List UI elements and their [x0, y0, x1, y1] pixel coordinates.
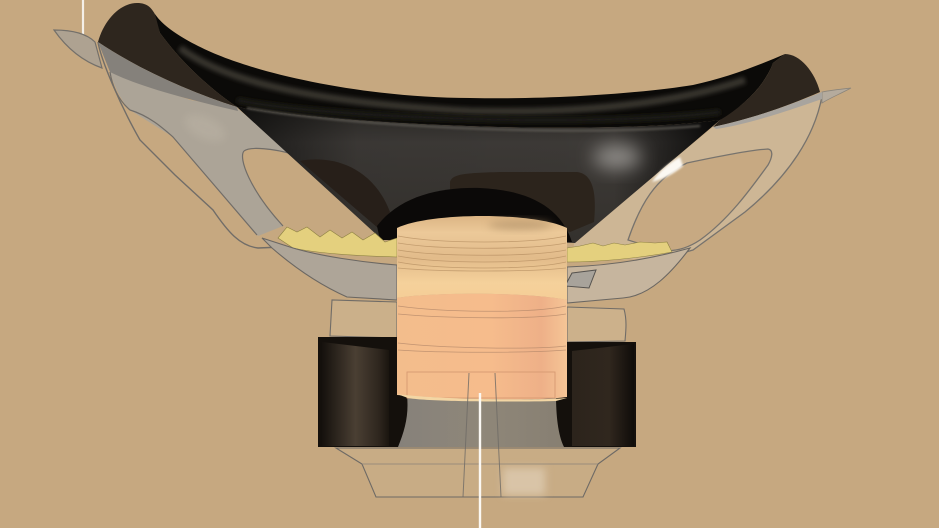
pointer line: top left — [82, 0, 84, 35]
surround lower band — [237, 100, 720, 120]
cone highlight streak — [652, 157, 683, 182]
pole piece — [398, 395, 564, 447]
cone body — [237, 107, 720, 243]
magnet: left — [318, 337, 410, 447]
flange: left — [54, 30, 102, 68]
flange: right — [822, 88, 851, 103]
vent tube — [463, 373, 501, 497]
winding lines — [398, 236, 566, 271]
basket bottom: left — [262, 238, 397, 300]
basket rim band: right — [713, 92, 822, 129]
spider: left — [278, 227, 397, 257]
left lower opening outline — [98, 42, 282, 248]
rear housing — [336, 448, 620, 497]
spider: right — [567, 242, 672, 262]
dust cap — [377, 188, 572, 242]
magnet: right — [552, 342, 636, 447]
surround: inner brown wall, left — [98, 3, 237, 107]
coil bottom rim — [397, 394, 567, 402]
surround lighter band — [180, 48, 745, 111]
cone inner brown reflection — [300, 159, 390, 228]
surround: front roll — [155, 14, 785, 131]
basket frame: left side — [98, 42, 292, 248]
voice coil former: lower — [397, 294, 567, 399]
housing highlight — [503, 468, 545, 495]
cone soft glow — [593, 145, 641, 169]
basket bottom: right — [567, 248, 690, 303]
surround: inner brown wall, right — [713, 54, 820, 127]
basket frame: right side — [570, 96, 822, 262]
basket frame shading — [180, 109, 230, 147]
pointer line: bottom center — [479, 393, 481, 528]
basket rim band: left — [98, 42, 238, 111]
terminal block — [565, 270, 596, 288]
top plate: right — [567, 307, 626, 342]
top plate: left — [330, 300, 397, 338]
voice coil former: upper — [397, 216, 567, 300]
cone rib highlight — [247, 108, 700, 131]
basket right window opening — [628, 149, 772, 251]
